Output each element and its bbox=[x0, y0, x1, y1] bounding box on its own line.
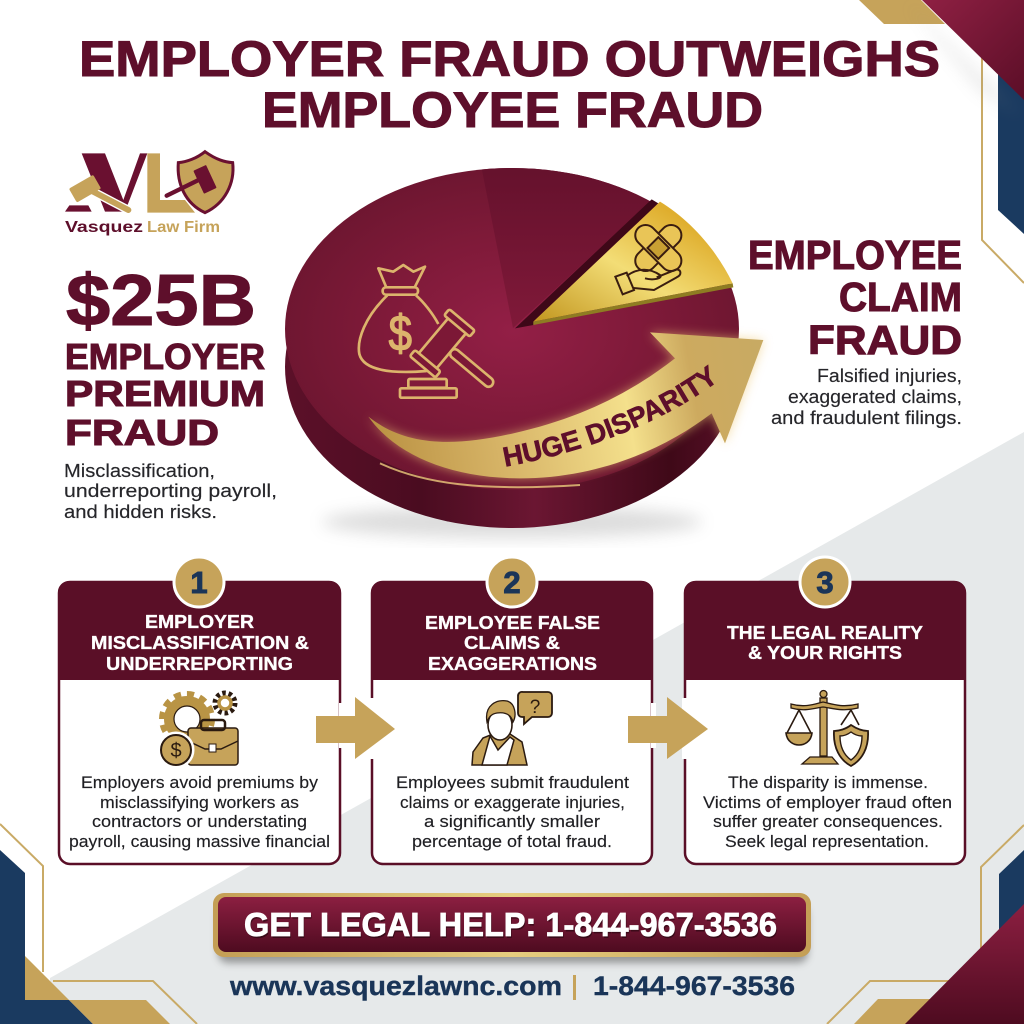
heading 1 bbox=[91, 611, 309, 674]
heading 1: MISCLASSIFICATION & bbox=[91, 632, 309, 653]
arrow: huge disparity bbox=[368, 332, 763, 478]
body text 3: The disparity is immense. bbox=[728, 773, 928, 792]
text block: employee fraud description: and fraudulent filings. bbox=[771, 408, 962, 428]
heading 2: EXAGGERATIONS bbox=[428, 653, 597, 674]
call to action button bbox=[213, 893, 811, 963]
pie side wall bbox=[285, 206, 739, 528]
icon: scales and shield bbox=[786, 690, 868, 766]
footer contact line bbox=[229, 971, 795, 1001]
arrow: step 2 to step 3 bbox=[628, 697, 708, 759]
text block: employer fraud description bbox=[64, 461, 277, 522]
body text 3 bbox=[703, 773, 952, 851]
stat: $25B employer premium fraud: PREMIUM bbox=[65, 373, 265, 414]
body text 3: Victims of employer fraud often bbox=[703, 793, 952, 812]
logo: Vasquez Law Firm: Vasquez bbox=[65, 219, 143, 236]
body text 3: Seek legal representation. bbox=[725, 832, 929, 851]
text block: employee fraud description: Falsified injuries, bbox=[817, 366, 962, 386]
stat: employee claim fraud: EMPLOYEE bbox=[748, 232, 962, 278]
logo: Vasquez Law Firm: Law Firm bbox=[147, 219, 220, 236]
stat: employee claim fraud bbox=[748, 232, 962, 363]
heading 1: UNDERREPORTING bbox=[106, 653, 293, 674]
body text 1 bbox=[69, 773, 330, 851]
corner decoration: bottom left bbox=[0, 824, 197, 1024]
heading 2: CLAIMS & bbox=[464, 632, 560, 653]
text block: employee fraud description: exaggerated claims, bbox=[788, 387, 962, 407]
title bbox=[79, 31, 940, 138]
badge 2: 2 bbox=[503, 565, 521, 600]
text block: employee fraud description bbox=[771, 366, 962, 428]
icon: injured worker with question bubble: ? bbox=[530, 697, 540, 718]
text block: employer fraud description: underreporting payroll, bbox=[64, 481, 277, 501]
heading 3: & YOUR RIGHTS bbox=[748, 642, 902, 663]
body text 2: a significantly smaller bbox=[424, 812, 600, 831]
body text 1: payroll, causing massive financial bbox=[69, 832, 330, 851]
body text 1: Employers avoid premiums by bbox=[81, 773, 319, 792]
text block: employer fraud description: Misclassification, bbox=[64, 461, 215, 481]
title: EMPLOYEE FRAUD bbox=[262, 82, 763, 138]
stat: $25B employer premium fraud: EMPLOYER bbox=[65, 336, 265, 377]
panel: step 3 legal reality bbox=[684, 557, 966, 864]
body text 2: Employees submit fraudulent bbox=[396, 773, 629, 792]
stat: employee claim fraud: CLAIM bbox=[839, 274, 962, 320]
icon: gears and briefcase bbox=[160, 693, 238, 766]
stat: $25B employer premium fraud: FRAUD bbox=[65, 412, 219, 453]
footer contact line: 1-844-967-3536 bbox=[593, 971, 795, 1001]
badge 1 bbox=[174, 557, 224, 607]
bottom rim highlight bbox=[380, 463, 580, 487]
body text 2: percentage of total fraud. bbox=[412, 832, 612, 851]
badge 3: 3 bbox=[816, 565, 834, 600]
stat: employee claim fraud: FRAUD bbox=[808, 317, 962, 363]
stat: $25B employer premium fraud bbox=[65, 261, 265, 453]
corner decoration: bottom right bbox=[827, 825, 1024, 1024]
heading 3: THE LEGAL REALITY bbox=[727, 622, 924, 643]
icon: injured worker with question bubble bbox=[472, 692, 552, 765]
arrow label: HUGE DISPARITY bbox=[502, 364, 714, 467]
panel: step 2 employee false claims bbox=[371, 557, 653, 864]
heading 1: EMPLOYER bbox=[145, 611, 254, 632]
call to action button: GET LEGAL HELP: 1-844-967-3536 bbox=[244, 906, 777, 943]
badge 3 bbox=[800, 557, 850, 607]
icon: money bag and gavel bbox=[359, 265, 512, 409]
pie top: employer share bbox=[285, 168, 739, 490]
title: EMPLOYER FRAUD OUTWEIGHS bbox=[79, 31, 940, 87]
footer contact line: www.vasquezlawnc.com bbox=[229, 971, 562, 1001]
pie chart: huge disparity bbox=[285, 168, 768, 544]
body text 1: contractors or understating bbox=[92, 812, 307, 831]
stat: $25B employer premium fraud: $25B bbox=[66, 261, 256, 341]
slice: employee share bbox=[533, 202, 733, 322]
body text 2 bbox=[396, 773, 629, 851]
body text 3: suffer greater consequences. bbox=[713, 812, 943, 831]
corner decoration: top right bbox=[859, 0, 1024, 283]
body text 2: claims or exaggerate injuries, bbox=[400, 793, 625, 812]
heading 3 bbox=[727, 622, 924, 663]
icon: money bag and gavel: $ bbox=[389, 305, 412, 361]
text block: employer fraud description: and hidden risks. bbox=[64, 502, 217, 522]
panel: step 1 employer misclassification bbox=[58, 557, 341, 864]
background cut-out beyond slice bbox=[660, 197, 753, 283]
badge 2 bbox=[487, 557, 537, 607]
icon: gears and briefcase: $ bbox=[170, 740, 182, 762]
body text 1: misclassifying workers as bbox=[100, 793, 299, 812]
heading 2 bbox=[425, 612, 600, 674]
wedge gap bbox=[515, 199, 658, 328]
arrow: step 1 to step 2 bbox=[316, 697, 395, 759]
badge 1: 1 bbox=[190, 565, 208, 600]
arrow glow bbox=[368, 332, 763, 478]
heading 2: EMPLOYEE FALSE bbox=[425, 612, 600, 633]
call to action button: GET LEGAL HELP: 1-844-967-3536 bbox=[245, 908, 778, 945]
logo: Vasquez Law Firm bbox=[65, 152, 233, 236]
icon: bandage and hand bbox=[615, 221, 686, 294]
